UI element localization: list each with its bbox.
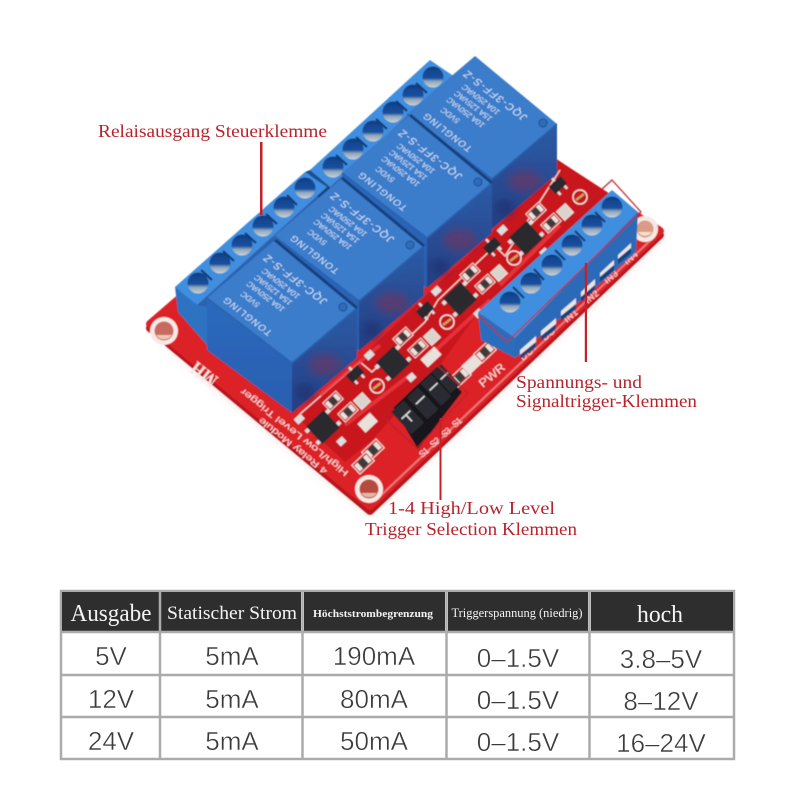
board silkscreen text: High/Low Level Trigger (238, 386, 350, 478)
board silkscreen text: IN1 (562, 307, 580, 325)
table header: Höchststrombegrenzung (313, 608, 434, 620)
relay 4: 15A 125VAC (452, 89, 495, 123)
label: Spannungs- und Signaltrigger-Klemmen: Spannungs- und (516, 372, 642, 392)
relay 4: 10A 250VAC (444, 96, 487, 129)
channel components (294, 173, 587, 474)
label: Spannungs- und Signaltrigger-Klemmen (516, 372, 697, 411)
relay 2: 5VDC (305, 228, 329, 247)
board silkscreen text: IN3 (602, 268, 620, 286)
board silkscreen text: 4 Relay Module (256, 416, 329, 476)
relay 2: JQC-3FF-S-Z (328, 190, 397, 244)
board silkscreen text: IN4 (622, 249, 640, 267)
row: 5V: 5V (95, 641, 128, 671)
relay 3: 10A 250VAC (394, 142, 437, 175)
label: trigger selection: Trigger Selection Klemmen (365, 519, 577, 539)
board shadow (150, 210, 666, 516)
relay 2 (274, 178, 424, 351)
relay 3: TONGLING (356, 170, 410, 212)
row: 24V: 0–1.5V (477, 727, 560, 757)
leader line: input terminals (585, 263, 587, 362)
row: 12V: 80mA (340, 684, 409, 714)
label: trigger selection: 1-4 High/Low Level (388, 498, 555, 518)
specification table (61, 591, 734, 759)
board silkscreen text: S1 (450, 415, 464, 430)
relay 1: 10A 250VAC (259, 267, 302, 300)
relay 2: TONGLING (288, 233, 342, 275)
relay 4: 10A 250VAC (459, 83, 502, 116)
label: Relaisausgang Steuerklemme: Relaisausgang Steuerklemme (98, 121, 327, 141)
relay 1: 5VDC (238, 290, 262, 309)
row: 24V: 5mA (205, 726, 259, 756)
screws (188, 66, 444, 294)
row: 12V: 0–1.5V (477, 685, 560, 715)
relay 4 (407, 56, 557, 229)
screws (500, 196, 622, 312)
callout outline: input terminals (478, 180, 641, 342)
relay 3 (342, 115, 492, 288)
board silkscreen text: MH (186, 357, 222, 391)
mounting hole: bottom (355, 475, 383, 503)
relay 3: 15A 125VAC (387, 148, 430, 182)
callout outline: jumpers (383, 365, 468, 448)
relay 2: 10A 250VAC (326, 205, 369, 238)
relay 1: TONGLING (221, 295, 275, 337)
relay 2: 15A 125VAC (319, 211, 362, 245)
label: Spannungs- und Signaltrigger-Klemmen: Signaltrigger-Klemmen (516, 391, 697, 411)
row: 24V (88, 726, 706, 758)
board silkscreen text: S2 (428, 435, 442, 450)
circuit board (150, 82, 660, 511)
table grid (61, 591, 734, 759)
relay module board photo (150, 56, 666, 516)
input terminal block (478, 190, 638, 359)
label: trigger selection (365, 498, 577, 539)
board silkscreen text: DC+ (518, 342, 540, 363)
row: 24V: 50mA (340, 726, 409, 756)
relay 1: 15A 125VAC (252, 273, 295, 307)
row: 5V: 0–1.5V (477, 643, 560, 673)
row: 24V: 24V (88, 726, 135, 756)
table header: Ausgabe (70, 601, 152, 627)
row: 5V: 190mA (333, 641, 416, 671)
row: 24V: 16–24V (616, 728, 706, 758)
relay 1: JQC-3FF-S-Z (261, 252, 330, 306)
relay 4: 5VDC (438, 106, 462, 125)
relay 3: JQC-3FF-S-Z (396, 127, 465, 181)
leader line: output terminals (260, 142, 262, 215)
relay 4: JQC-3FF-S-Z (461, 68, 530, 122)
mounting hole: left (150, 317, 178, 345)
row: 12V: 8–12V (623, 686, 699, 716)
table header (62, 592, 733, 631)
relay 4: TONGLING (421, 111, 475, 153)
board silkscreen text (186, 249, 640, 478)
board silkscreen text: S1 (417, 445, 431, 460)
relay 2: 10A 250VAC (311, 218, 354, 251)
table header: hoch (637, 602, 683, 628)
row: 12V: 12V (88, 684, 135, 714)
row: 5V: 3.8–5V (620, 644, 703, 674)
row: 5V: 5mA (205, 641, 259, 671)
output terminal block: rear (175, 60, 470, 345)
table header: Triggerspannung (niedrig) (452, 606, 582, 620)
relay 1: 10A 250VAC (244, 280, 287, 313)
board silkscreen text: DC- (540, 324, 559, 343)
row: 5V (95, 641, 703, 674)
jumper header (391, 364, 462, 449)
row: 12V (88, 684, 699, 716)
relay 3: 10A 250VAC (379, 155, 422, 188)
mounting hole: right (632, 216, 658, 242)
table header: Statischer Strom (167, 603, 297, 624)
board silkscreen text: S3 (439, 425, 453, 440)
row: 12V: 5mA (205, 684, 259, 714)
relay 1 (207, 240, 357, 413)
relay 3: 5VDC (373, 165, 397, 184)
board silkscreen text: IN2 (583, 288, 601, 306)
board silkscreen text: PWR (476, 360, 508, 390)
leader line: jumpers (440, 418, 442, 500)
